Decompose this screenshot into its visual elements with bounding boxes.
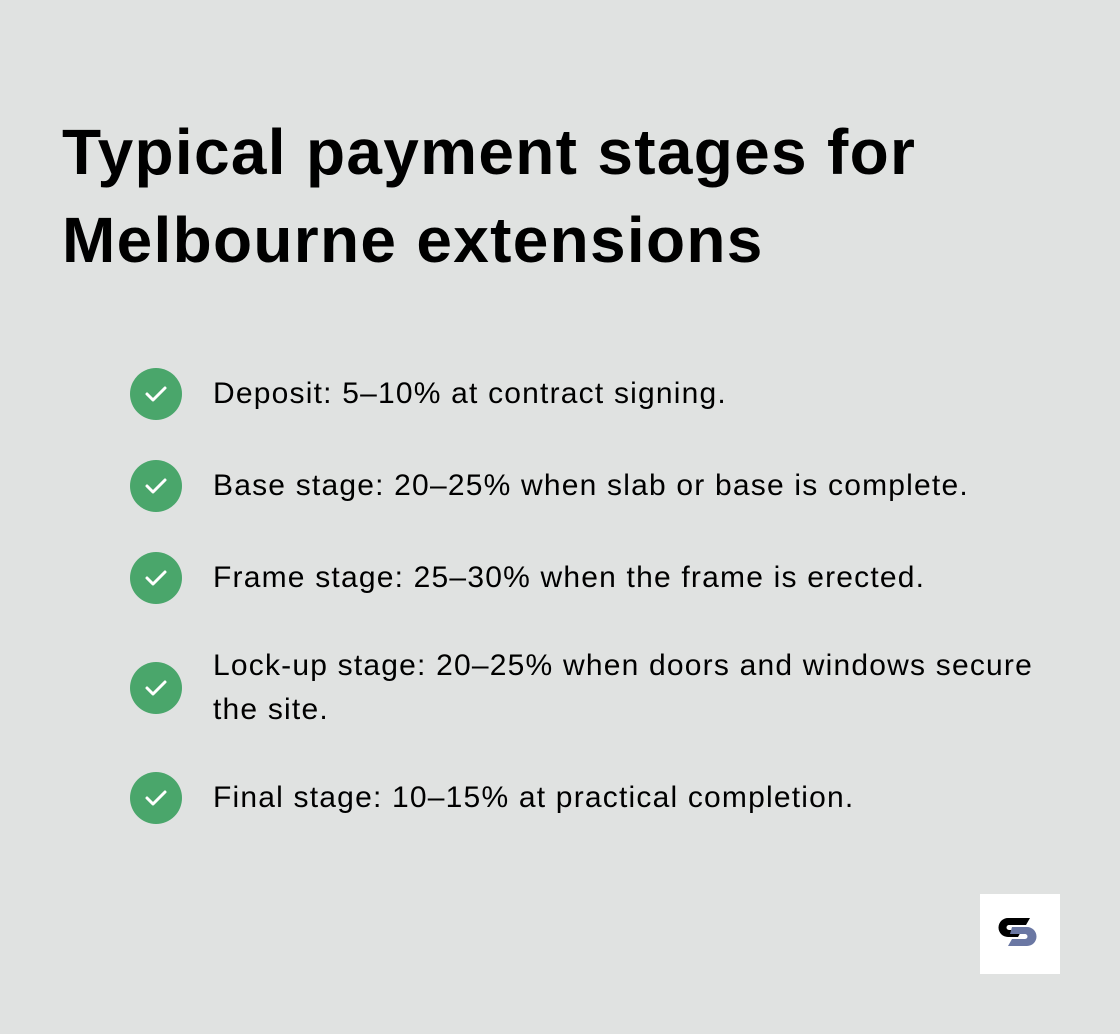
text: Lock-up stage: 20–25% when doors and windows secure the site. bbox=[213, 649, 1033, 726]
icon: check bbox=[130, 552, 182, 604]
title: Melbourne extensions bbox=[62, 204, 764, 276]
item: frame bbox=[130, 552, 925, 604]
title bbox=[62, 116, 916, 276]
item: deposit bbox=[130, 368, 727, 420]
text: Base stage: 20–25% when slab or base is complete. bbox=[213, 469, 969, 502]
text: Final stage: 10–15% at practical completion. bbox=[213, 781, 854, 814]
icon: check bbox=[130, 368, 182, 420]
text: Frame stage: 25–30% when the frame is erected. bbox=[213, 561, 925, 594]
icon: check bbox=[130, 772, 182, 824]
icon: check bbox=[130, 460, 182, 512]
logo bbox=[980, 894, 1060, 974]
item: final bbox=[130, 772, 854, 824]
item: base bbox=[130, 460, 969, 512]
icon: check bbox=[130, 662, 182, 714]
item: lock-up bbox=[130, 649, 1033, 726]
title: Typical payment stages for bbox=[62, 116, 916, 188]
text: Deposit: 5–10% at contract signing. bbox=[213, 377, 727, 410]
